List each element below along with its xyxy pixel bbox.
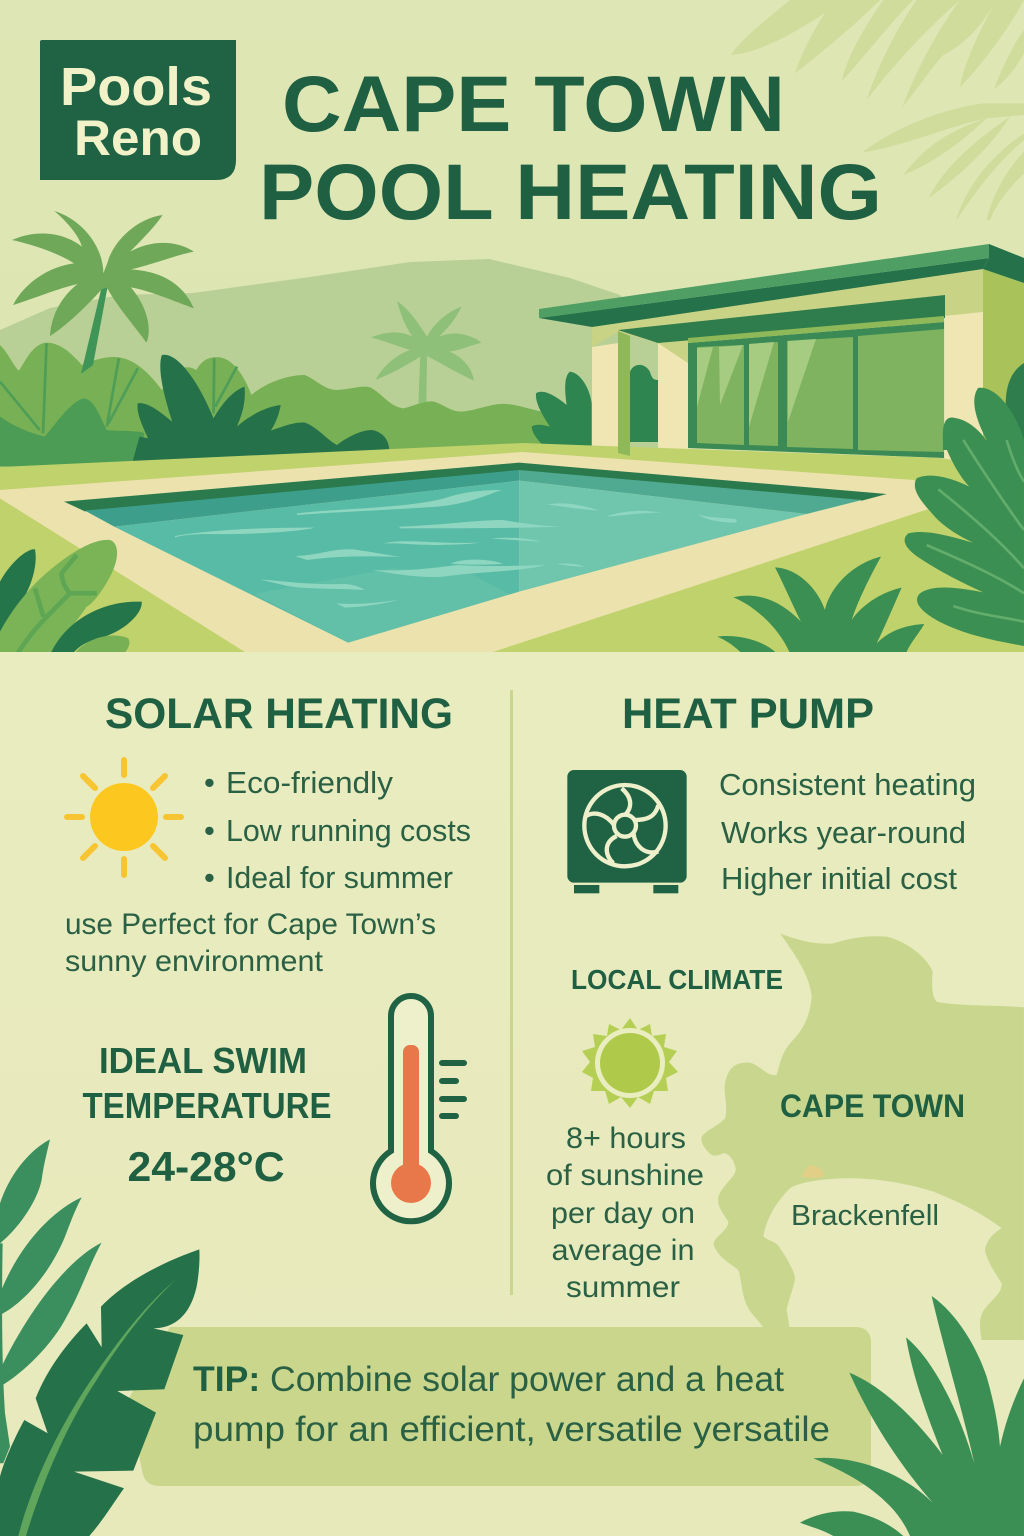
text: sunshine: average in (552, 1234, 694, 1267)
window frame (688, 322, 944, 458)
pane reflections (697, 339, 816, 427)
icon: heat pump unit (567, 770, 687, 893)
text: sunshine (546, 1122, 704, 1304)
text: temperature: IDEAL SWIM (99, 1040, 307, 1081)
callout: tip (128, 1327, 871, 1486)
list: solar benefits: • (204, 860, 215, 895)
roof (539, 258, 989, 327)
overhang (618, 295, 945, 343)
foreground plant: small fan shrub (717, 557, 924, 653)
heading: heat pump: HEAT PUMP (622, 690, 874, 738)
text: sunshine: summer (566, 1271, 680, 1304)
icon: sun (67, 760, 181, 875)
map label: Brackenfell: Brackenfell (791, 1200, 939, 1232)
hedge and shrubs (0, 343, 551, 467)
list: solar benefits: Eco-friendly (226, 765, 393, 800)
panel: local climate (546, 964, 965, 1304)
panel: heat pump (567, 690, 976, 896)
title (259, 59, 882, 236)
house (539, 244, 1024, 460)
shrub beside house (532, 372, 592, 448)
map label: Cape Town: CAPE TOWN (780, 1088, 965, 1124)
background palm (371, 301, 481, 403)
palm fronds: top right (731, 0, 1024, 220)
mountains (0, 259, 660, 460)
logo: Pools (60, 57, 212, 117)
title: POOL HEATING (259, 147, 882, 236)
list: heat pump features: Higher initial cost (721, 861, 957, 896)
gap behind post (630, 336, 658, 370)
list: solar benefits: • (204, 813, 215, 848)
text: temperature: 24-28°C (128, 1143, 284, 1190)
heading: solar heating: SOLAR HEATING (105, 690, 453, 738)
logo: Reno (74, 110, 202, 166)
side wall (983, 269, 1024, 440)
foreground plant: bottom left of scene (0, 540, 142, 655)
cream pillars (592, 343, 618, 449)
list: solar benefits: • (204, 765, 215, 800)
text: sunshine: 8+ hours (566, 1122, 686, 1155)
callout: tip: TIP: Combine solar power and a heat (193, 1360, 784, 1399)
icon: thermometer (373, 996, 464, 1221)
list: heat pump features (719, 767, 976, 896)
logo (40, 40, 236, 180)
callout: tip: pump for an efficient, versatile yersatile (193, 1410, 830, 1449)
text: solar note: sunny environment (65, 945, 324, 978)
plant: bottom left leaves (0, 1139, 200, 1536)
text: temperature (82, 1040, 332, 1190)
text: solar note (65, 908, 436, 978)
lawn (0, 443, 1024, 652)
text: temperature: TEMPERATURE (82, 1085, 332, 1126)
text: sunshine: of sunshine (546, 1159, 704, 1192)
text: solar note: use Perfect for Cape Town’s (65, 908, 436, 941)
list: solar benefits: Ideal for summer (226, 860, 453, 895)
list: solar benefits (204, 765, 471, 895)
pool deck and pool (0, 452, 931, 652)
divider (510, 690, 513, 1295)
front wall band (592, 269, 983, 347)
main palm (12, 211, 194, 374)
list: heat pump features: Consistent heating (719, 767, 976, 802)
icon: climate sun (582, 1018, 678, 1108)
large right leaves (905, 363, 1024, 646)
heading: local climate: LOCAL CLIMATE (571, 964, 783, 995)
entrance post (618, 331, 630, 456)
list: solar benefits: Low running costs (226, 813, 471, 848)
title: CAPE TOWN (282, 59, 785, 148)
panel: ideal swim temperature (82, 996, 464, 1221)
water ripples (175, 490, 737, 608)
list: heat pump features: Works year-round (721, 815, 966, 850)
panel: solar heating (65, 690, 471, 978)
window panes (697, 329, 944, 452)
panel: hero scene (0, 0, 1024, 655)
map silhouette (701, 933, 1024, 1340)
plant: bottom right leaves (800, 1296, 1024, 1536)
text: sunshine: per day on (551, 1197, 695, 1230)
